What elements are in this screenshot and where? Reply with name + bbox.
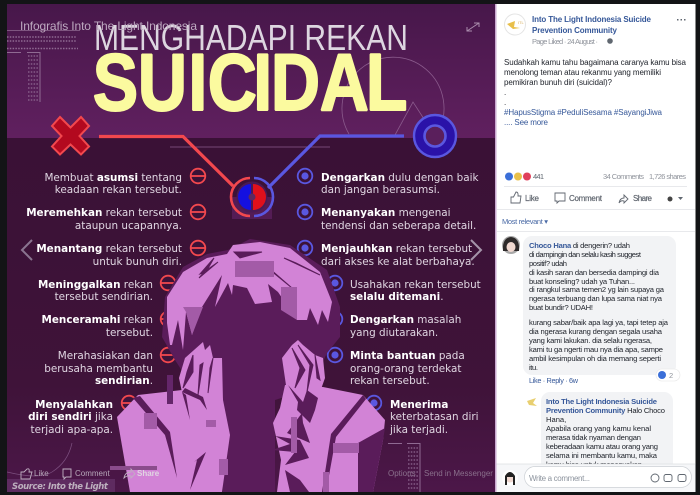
comment bubble: Choco Hana: positif? udah — [529, 259, 567, 268]
image caption: Infografis Into The Light Indonesia — [20, 19, 197, 33]
reaction counts: 441 — [533, 172, 544, 181]
action buttons: Comment — [569, 194, 603, 203]
text block: do list: keterbatasan diri — [390, 411, 478, 423]
action buttons: Share — [633, 194, 653, 203]
source label: Source: Into the Light — [12, 482, 109, 492]
source label — [7, 479, 115, 492]
panel: infographic image — [7, 4, 495, 492]
menu dots — [677, 19, 686, 20]
comment reaction badge: 2 — [669, 371, 673, 380]
text block: do list: dari akses ke alat berbahaya. — [321, 256, 475, 268]
comment bubble: page reply: selama ini membantu kamu, maka — [546, 451, 658, 460]
pink hair — [167, 242, 332, 350]
comment reaction badge — [656, 369, 680, 381]
commenter avatar — [502, 236, 520, 254]
body shadow cuts — [133, 385, 385, 492]
reaction counts — [505, 172, 686, 181]
red connector line — [99, 136, 233, 186]
text block: do list: orang-orang terdekat — [350, 363, 461, 375]
icon: red cross — [52, 117, 89, 154]
text block: do not list: Menceramahi rekan — [42, 314, 153, 326]
text block: do list: Dengarkan dulu dengan baik — [321, 172, 479, 184]
text block: do not list: tersebut. — [106, 327, 153, 339]
page name: Prevention Community — [532, 26, 618, 35]
pixel block overlays — [144, 413, 359, 492]
image action bar — [21, 469, 493, 479]
icon: globe — [607, 38, 613, 44]
comment bubble: Choco Hana: itu. — [529, 363, 538, 372]
post body: . — [504, 88, 506, 97]
post body: .... See more — [504, 118, 549, 127]
left hand fingers — [179, 342, 223, 402]
illustration: person holding head — [110, 239, 385, 492]
text block: do list: yang diutarakan. — [350, 327, 438, 339]
comment bubble: Choco Hana: ngerasa terbuang dan lupa sama niat nya — [529, 294, 663, 303]
decorative arc bottom left — [7, 443, 72, 476]
reaction counts: 34 Comments — [603, 172, 644, 181]
dark head and neck silhouette — [162, 239, 340, 492]
comment bubble: Choco Hana: buat konseling? udah ya Tuhan... — [529, 277, 635, 286]
decorative dot grid bottom right — [388, 444, 420, 492]
text block: do list — [321, 172, 481, 436]
text block: do list: Menerima — [390, 399, 448, 411]
text block: do not list — [26, 172, 182, 436]
text block: do list: Dengarkan masalah — [350, 314, 461, 326]
image action bar: Like — [34, 469, 49, 478]
text block: do not list: terjadi apa-apa. — [30, 424, 113, 436]
text block: do not list: Meninggalkan rekan — [38, 279, 153, 291]
blue connector line — [268, 136, 404, 188]
comment input bar: Write a comment... — [529, 474, 590, 483]
sort label: Most relevant ▾ — [502, 217, 548, 226]
text block: do not list: diri sendiri jika — [28, 411, 113, 423]
comment input bar — [496, 464, 696, 492]
text block: do not list: Meremehkan rekan tersebut — [26, 207, 182, 219]
text block: do list: Menjauhkan rekan tersebut — [321, 243, 472, 255]
image action bar: Share — [137, 469, 160, 478]
comment bubble: Choco Hana: Choco Hana di dengerin? udah — [529, 241, 630, 250]
decorative dot grid top left — [7, 30, 80, 102]
text block: do list: dan jangan berasumsi. — [321, 184, 440, 196]
comment bubble: page reply: kamu bisa untuk menanyakan — [546, 460, 642, 469]
comment bubble: Choco Hana: di rangkul sama temen2 yg lain supaya ga — [529, 285, 665, 294]
comment bubble: Choco Hana: dia ngerasa kurang dengan segala usaha — [529, 327, 663, 336]
post body: #HapusStigma #PeduliSesama #SayangiJiwa — [504, 108, 663, 117]
text block: do not list: sendirian. — [95, 375, 153, 387]
post body: pemikiran bunuh diri (suicidal)? — [504, 78, 613, 87]
text block: do list: Minta bantuan pada — [350, 350, 465, 362]
page name — [532, 15, 652, 46]
comment thread — [502, 236, 680, 482]
page name: Page Liked · 24 August · — [532, 37, 598, 46]
image action bar: Comment — [75, 469, 110, 478]
reply avatar — [527, 398, 537, 406]
hair highlights — [183, 261, 297, 335]
right body — [273, 385, 385, 492]
finger cuts — [183, 345, 320, 395]
post body: Sudahkah kamu tahu bagaimana caranya kamu bisa — [504, 58, 687, 67]
comment bubble: Choco Hana: di dampingin dan selalu kasih suggest — [529, 250, 642, 259]
text block: do not list: tersebut sendirian. — [55, 291, 153, 303]
text block: do list: jika terjadi. — [389, 424, 448, 436]
text block: do not list: Merahasiakan dan — [58, 350, 153, 362]
comment bubble: page reply: Apabila orang yang kamu kenal — [546, 424, 651, 433]
arrow: next — [471, 240, 481, 260]
page avatar: ITL — [518, 20, 525, 25]
comment bubble: page reply: keberadaan kamu atau orang yang — [546, 442, 658, 451]
text block: do not list: untuk bunuh diri. — [93, 256, 182, 268]
action buttons: Like — [525, 194, 540, 203]
left body — [117, 390, 230, 492]
text block: do list: rekan tersebut. — [350, 375, 430, 387]
action buttons — [511, 192, 683, 203]
page name: Into The Light Indonesia Suicide — [532, 15, 652, 24]
comment bubble: Choco Hana: kurang sabar/baik apa lagi ya, tapi tetep aja — [529, 318, 669, 327]
text block: do not list: Membuat asumsi tentang — [44, 172, 182, 184]
comment bubble: page reply: Hana, — [546, 415, 566, 424]
text block: do list: tendensi dan seberapa detail. — [321, 220, 476, 232]
reaction counts: 1,726 shares — [649, 172, 686, 181]
icon: center half red half blue — [231, 178, 273, 219]
text block: do list: Menanyakan mengenai — [321, 207, 451, 219]
upper background — [7, 4, 495, 138]
image action bar: Options — [388, 469, 416, 478]
text block: do not list: berusaha membantu — [44, 363, 153, 375]
post body — [504, 58, 687, 127]
text block: do not list: keadaan rekan tersebut. — [55, 184, 182, 196]
hair shadow cuts — [199, 252, 320, 288]
title: SUICIDAL — [93, 36, 407, 127]
comment bubble: Choco Hana — [523, 236, 676, 375]
icon: expand — [467, 23, 479, 31]
page avatar — [504, 14, 526, 35]
title: MENGHADAPI REKAN — [94, 17, 408, 58]
icon: blue target — [414, 115, 456, 157]
image action bar: Send in Messenger — [424, 469, 493, 478]
dark neck overlay rect — [167, 375, 173, 404]
comment bubble: Choco Hana: ambil kesimpulan oh dia memang seperti — [529, 354, 661, 363]
comment bubble: Choco Hana: di kasih saran dan bersedia dampingi dia — [529, 268, 660, 277]
text block: do not list: Menyalahkan — [35, 399, 113, 411]
blue plus icons — [298, 169, 381, 410]
comment bubble: page reply — [541, 392, 673, 482]
comment meta: Like · Reply · 6w — [529, 376, 579, 385]
red minus icons — [122, 169, 205, 410]
lower background — [7, 138, 495, 492]
text block: do list: Usahakan rekan tersebut — [350, 279, 481, 291]
comment bubble: Choco Hana: buat bundir? UDAH! — [529, 303, 593, 312]
post body: menolong teman atau rekanmu yang memiliki — [504, 68, 661, 77]
decorative circle and triangle — [170, 57, 444, 147]
comment bubble: page reply: Prevention Community Halo Choco — [546, 406, 665, 415]
post body: . — [504, 98, 506, 107]
comment bubble: Choco Hana: yang kami lakukan. dia selalu ngerasa, — [529, 336, 652, 345]
comment bubble: Choco Hana: kami tu ga ngerti mau nya dia apa, sampe — [529, 345, 663, 354]
text block: do not list: ataupun ucapannya. — [75, 220, 182, 232]
comment bubble: page reply: Into The Light Indonesia Suicide — [546, 397, 657, 406]
arrow: previous — [22, 240, 32, 260]
right hand fingers — [282, 340, 325, 392]
panel: Facebook post sidebar — [495, 4, 696, 492]
comment bubble: page reply: merasa tidak nyaman dengan — [546, 433, 641, 442]
text block: do not list: Menantang rekan tersebut — [36, 243, 182, 255]
text block: do list: selalu ditemani. — [350, 291, 444, 303]
